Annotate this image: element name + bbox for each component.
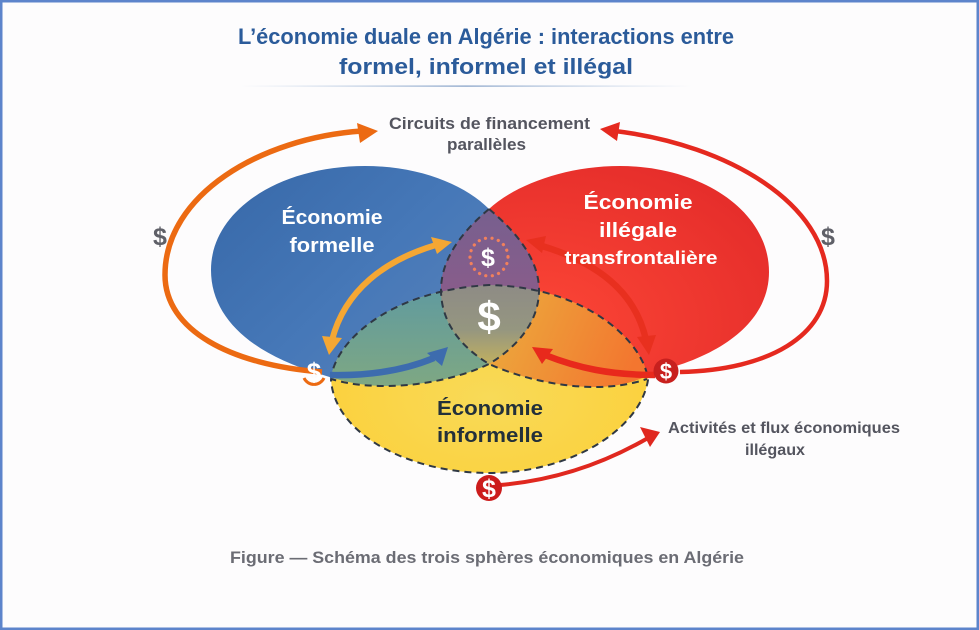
icon: dollar illegal node: $ [660, 359, 672, 384]
icon: dollar left: $ [153, 223, 167, 251]
label: illegal economy: illégale [599, 220, 677, 242]
label: illegal economy: Économie [584, 191, 692, 214]
icon: dollar top overlap: $ [481, 244, 495, 272]
label: illegal activities [668, 420, 900, 459]
icon: dollar right: $ [821, 223, 835, 251]
icon: dollar bottom node [476, 475, 502, 503]
venn diagram: three economic spheres [211, 166, 769, 473]
overlap: illegal and informal [441, 291, 646, 387]
overlap: all three [442, 285, 539, 364]
arrow: red illegal to centre [532, 347, 655, 375]
label: illegal economy: transfrontalière [564, 248, 718, 268]
sphere: formal economy [211, 166, 539, 386]
label: illegal activities: illégaux [745, 442, 805, 459]
label: illegal economy [564, 191, 718, 268]
label: formal economy [282, 206, 382, 257]
overlap: formal and informal [332, 293, 489, 386]
sphere: illegal cross-border economy [441, 166, 769, 387]
label: parallel circuits [389, 115, 591, 154]
arrow: amber two-way [322, 237, 452, 355]
arrow: red to parallel circuits [600, 122, 827, 372]
label: parallel circuits: Circuits de financement [389, 115, 591, 133]
caption: Figure — Schéma des trois sphères économiques en Algérie [230, 548, 744, 567]
arrow: red two-way [526, 236, 656, 355]
label: formal economy: formelle [290, 235, 374, 257]
arrow: illegal activities [500, 427, 660, 485]
dashed outlines [331, 209, 648, 473]
title: L’économie duale en Algérie : interactions entre [238, 24, 734, 49]
icon: dollar centre: $ [477, 293, 501, 340]
arrow: orange to parallel circuits [165, 123, 378, 372]
overlap: formal and illegal [441, 210, 539, 300]
label: formal economy: Économie [282, 206, 382, 229]
title: formel, informel et illégal [339, 54, 633, 79]
arrow: blue formal to centre [330, 347, 448, 375]
label: informal economy [437, 397, 543, 447]
label: illegal activities: Activités et flux économiques [668, 420, 900, 437]
title [238, 24, 734, 79]
label: parallel circuits: parallèles [447, 136, 526, 154]
label: informal economy: Économie [437, 397, 543, 420]
icon: dollar illegal node [654, 358, 678, 384]
icon: dollar top overlap [470, 238, 508, 276]
icon: dollar formal node: $ [307, 357, 322, 387]
icon: dollar bottom node: $ [482, 475, 496, 503]
label: informal economy: informelle [437, 425, 543, 447]
sphere: informal economy [331, 285, 648, 473]
